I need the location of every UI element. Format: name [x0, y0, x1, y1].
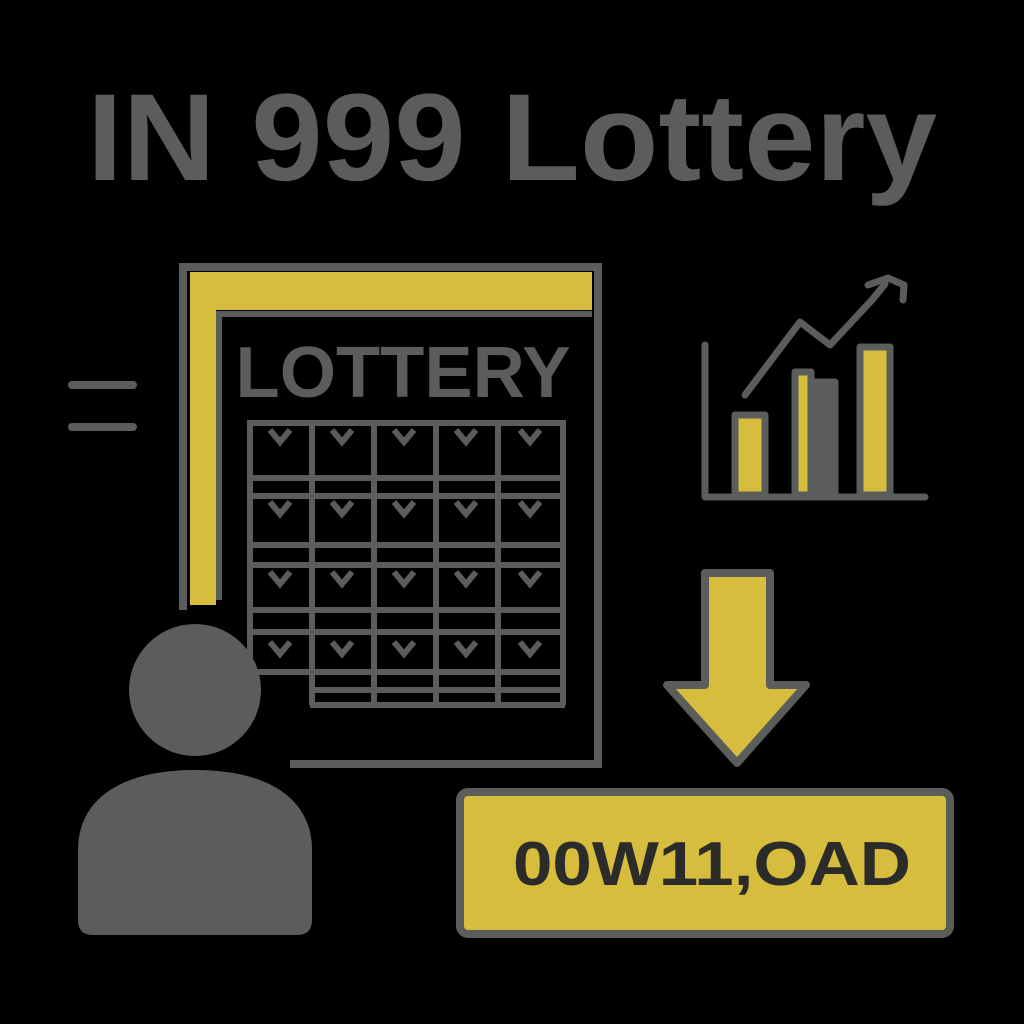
- icon: person: [78, 624, 312, 935]
- ticket heading: LOTTERY: [236, 333, 570, 413]
- lottery ticket: [183, 267, 598, 764]
- title: IN 999 Lottery: [87, 69, 937, 207]
- icon: speed dashes: [72, 385, 133, 427]
- result box: 00W11,OAD: [513, 830, 911, 899]
- number grid: [248, 420, 565, 705]
- arrow: down: [667, 573, 806, 763]
- result box: [460, 792, 950, 934]
- bar chart: [705, 278, 925, 497]
